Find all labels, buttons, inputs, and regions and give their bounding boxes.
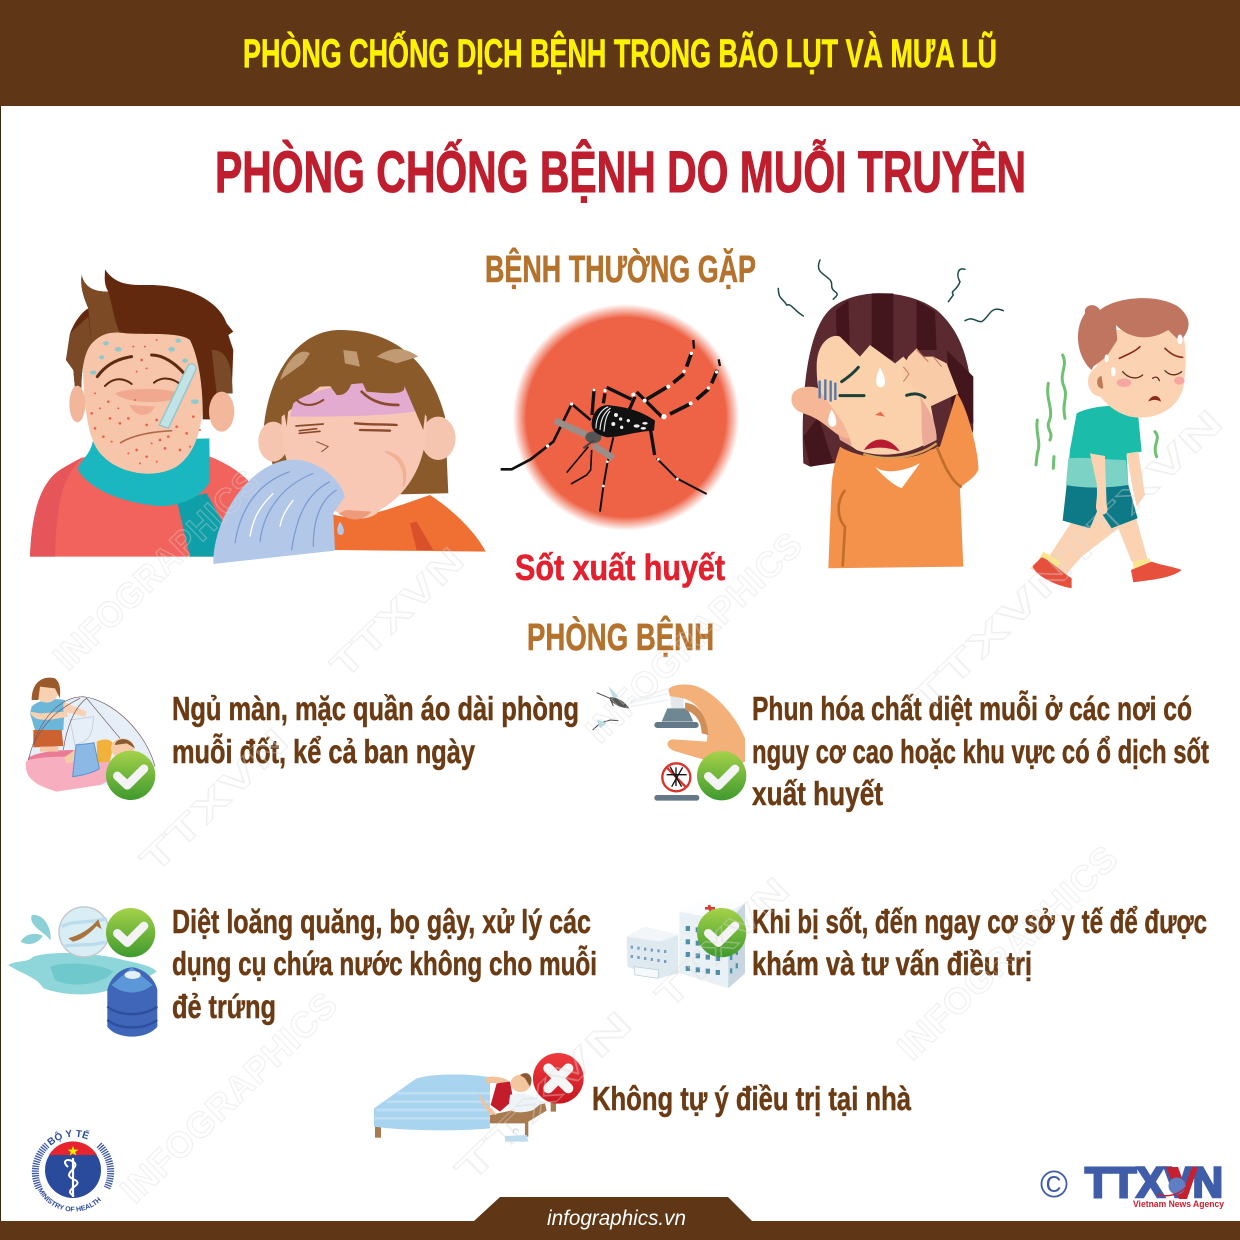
footer band with tab (0, 1197, 1240, 1240)
watermarks: TTXVN (902, 545, 1082, 721)
watermarks: TTXVN (1052, 400, 1232, 576)
illustration: girl coughing into cloth (213, 330, 486, 564)
footer url: infographics.vn (547, 1207, 686, 1230)
icon: hospital with check (627, 898, 746, 988)
text: spray insecticide (752, 690, 1209, 812)
text: sleep under net (172, 690, 579, 770)
text: go to clinic (752, 903, 1207, 982)
logo: TTXVN: TTXVN (1085, 1159, 1223, 1207)
logo: ministry of health: BỘ Y TẾ (46, 1130, 90, 1146)
heading: common disease: BỆNH THƯỜNG GẶP (485, 247, 756, 291)
text: kill larvae: đẻ trứng (172, 988, 276, 1025)
watermarks: TTXVN (132, 719, 297, 881)
watermarks: INFOGRAPHICS (45, 461, 268, 678)
icon: person in bed with cross (374, 1053, 584, 1142)
watermarks: TTXVN (447, 1001, 641, 1191)
text: kill larvae (172, 903, 597, 1025)
label: dengue fever: Sốt xuất huyết (515, 547, 725, 588)
illustration: woman with headache (778, 260, 1003, 568)
icon: larvae, puddle, water tank with check (8, 907, 157, 1037)
icon: mosquito net with check (26, 678, 155, 800)
watermarks: TTXVN (647, 868, 798, 1016)
watermarks: INFOGRAPHICS (112, 983, 346, 1211)
header band (0, 0, 1240, 106)
watermarks: INFOGRAPHICS (889, 837, 1126, 1068)
illustration: sick boy (1030, 298, 1189, 588)
text: kill larvae: dụng cụ chứa nước không cho muỗi (172, 945, 597, 982)
logo: TTXVN: Vietnam News Agency (1133, 1199, 1224, 1209)
logo: TTXVN: © (1040, 1164, 1068, 1206)
watermarks: INFOGRAPHICS (577, 523, 811, 751)
text: do not self-treat: Không tự ý điều trị tại nhà (592, 1080, 911, 1117)
icon: aedes mosquito on red circle (501, 304, 739, 531)
watermarks (45, 400, 1232, 1211)
text: go to clinic: khám và tư vấn điều trị (752, 945, 1032, 982)
text: sleep under net: Ngủ màn, mặc quần áo dài phòng (172, 690, 579, 727)
illustration: man with rash and thermometer (30, 269, 253, 557)
text: spray insecticide: xuất huyết (752, 775, 883, 812)
watermarks: TTXVN (322, 538, 473, 686)
logo: ministry of health: MINISTRY OF HEALTH (38, 1188, 101, 1212)
text: sleep under net: muỗi đốt, kể cả ban ngày (172, 733, 475, 770)
logo: ministry of health (32, 1130, 114, 1212)
text: kill larvae: Diệt loăng quăng, bọ gậy, xử lý các (172, 903, 591, 940)
icon: insecticide spray with check (593, 685, 746, 801)
heading: prevention: PHÒNG BỆNH (527, 615, 714, 659)
